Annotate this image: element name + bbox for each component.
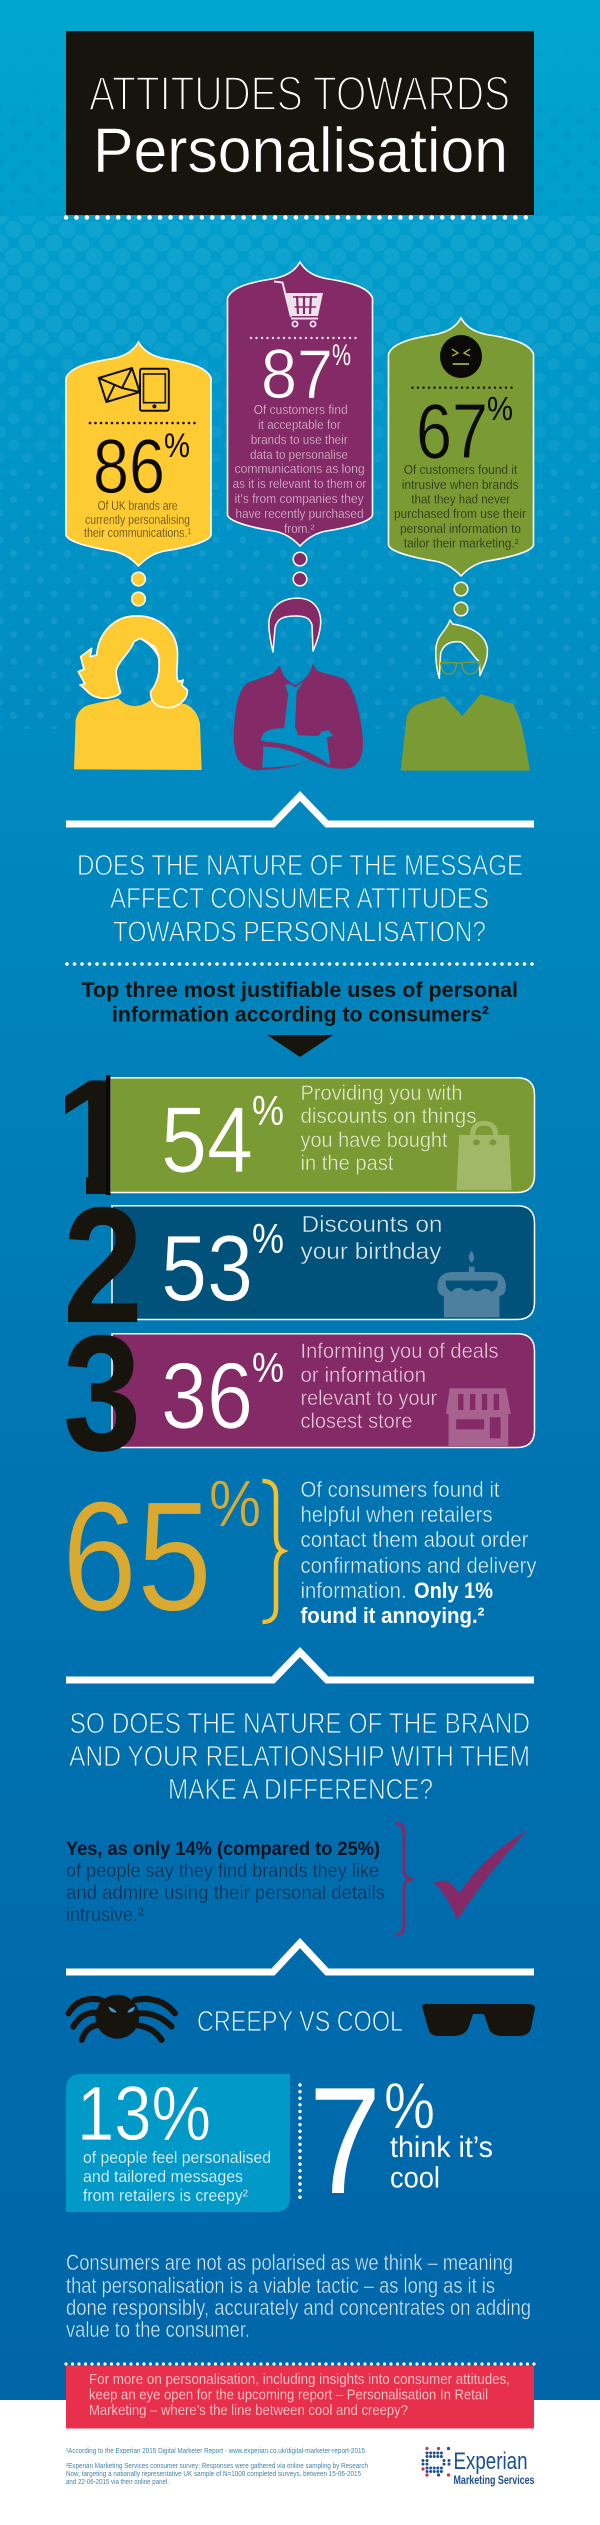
icon: sunglasses [422, 2004, 535, 2036]
text: 65% description: found it annoying.² [300, 1603, 484, 1628]
divider chevron 2 [66, 1652, 534, 1680]
thought dots: green [454, 582, 468, 616]
text: 13% description: of people feel personalised [83, 2149, 271, 2167]
text: footnotes: ¹According to the Experian 2015 Digital Marketer Report - www.experian.co.uk/digital-marketer-report-2015 [66, 2448, 365, 2455]
text: yes as only 14%: Yes, as only 14% (compared to 25%) [66, 1838, 380, 1860]
text: yellow bubble caption [84, 499, 191, 540]
text: green bubble caption: personal information to [400, 521, 521, 536]
text: footnotes: and 22-06-2015 via their online panel. [66, 2479, 169, 2486]
stat: 65%: % [209, 1466, 261, 1540]
text: purple bubble caption [233, 402, 367, 536]
heading: does the nature of the message: AFFECT CONSUMER ATTITUDES [110, 883, 489, 915]
icon: shopping bag [457, 1123, 512, 1190]
text: conclusion paragraph: value to the consumer. [66, 2317, 250, 2342]
text: 13% description: from retailers is creepy² [83, 2187, 248, 2205]
callout: red report banner [66, 2366, 534, 2428]
text: yes as only 14%: and admire using their personal details [66, 1882, 385, 1904]
icon: angry face [440, 335, 482, 378]
text: purple bubble caption: it's from companies they [235, 491, 364, 506]
text: purple bubble caption: communications as long [235, 461, 365, 476]
text: rank 3 description: Informing you of deals [300, 1340, 498, 1363]
figure: man with glasses [401, 620, 530, 771]
callout: red report banner: Marketing – where’s the line between cool and creepy? [89, 2403, 408, 2419]
text: conclusion paragraph: Consumers are not as polarised as we think – meaning [66, 2250, 513, 2275]
stat: 7% cool: % [384, 2069, 435, 2142]
text: green bubble caption: Of customers found it [404, 462, 518, 477]
panel: rank 1 card [65, 1075, 536, 1195]
text: 65% description: confirmations and delivery [300, 1553, 536, 1578]
stat: 87%: % [332, 339, 351, 372]
text: rank 1 description: discounts on things [300, 1105, 476, 1128]
divider chevron 1 [66, 796, 534, 824]
icon: shopping cart [274, 282, 323, 327]
stat: 86%: 86 [93, 424, 165, 510]
text: purple bubble caption: have recently purchased [236, 506, 364, 521]
icon: envelope and phone [99, 368, 169, 411]
text: green bubble caption: intrusive when brands [402, 477, 519, 492]
heading: so does the nature of the brand [69, 1708, 530, 1806]
stat: 53%: 53 [161, 1216, 253, 1320]
text: rank 1 description [300, 1082, 476, 1175]
text: rank 3 description: or information [300, 1364, 426, 1387]
figure: woman with yellow hair [74, 616, 202, 770]
title block [66, 31, 534, 215]
text: conclusion paragraph [66, 2250, 531, 2342]
text: conclusion paragraph: that personalisation is a viable tactic – as long as it is [66, 2273, 495, 2298]
bracket: purple brace [395, 1823, 411, 1935]
subheading: top three uses: information according to consumers² [112, 1002, 489, 1026]
text: rank 1 description: you have bought [300, 1129, 448, 1152]
text: rank 1 description: Providing you with [300, 1082, 462, 1105]
text: footnotes [66, 2448, 368, 2486]
panel: rank 3 card [63, 1301, 534, 1485]
text: rank 3 description [300, 1340, 498, 1433]
text: purple bubble caption: from.² [284, 521, 315, 536]
text: rank 3 description: closest store [300, 1410, 412, 1433]
panel: green thought bubble 67% [388, 318, 534, 576]
text: green bubble caption [394, 462, 527, 551]
text: Marketing Services: Marketing Services [454, 2475, 534, 2487]
stat: 36%: 36 [161, 1343, 253, 1448]
subheading: top three uses [82, 978, 518, 1026]
heading: does the nature of the message [77, 850, 523, 948]
stat: 87%: 87 [261, 335, 333, 413]
heading: so does the nature of the brand: AND YOUR RELATIONSHIP WITH THEM [69, 1741, 530, 1773]
text: yellow bubble caption: Of UK brands are [98, 499, 178, 513]
figure: man with crossed arms [234, 598, 363, 770]
stat: 86%: % [164, 427, 190, 465]
stat: 7% cool: 7 [309, 2056, 381, 2226]
icon: spider [68, 1995, 175, 2040]
text: rank 2 description: Discounts on [302, 1211, 442, 1237]
stat: 67%: 67 [416, 387, 488, 475]
icon: storefront [446, 1388, 511, 1446]
stat: 7% cool [309, 2056, 493, 2226]
text: footnotes: ²Experian Marketing Services consumer survey: Responses were gathered via online sampling by Research [66, 2463, 368, 2470]
number 1: 1 [50, 1045, 141, 1229]
panel: rank 2 card [63, 1173, 534, 1357]
text: purple bubble caption: as it is relevant to them or [233, 476, 367, 491]
text: 65% description [300, 1477, 536, 1628]
text: rank 3 description: relevant to your [300, 1387, 437, 1410]
panel: 13% creepy [66, 2071, 290, 2212]
stat: 54%: 54 [161, 1087, 253, 1192]
text: yes as only 14%: of people say they find brands they like [66, 1860, 379, 1882]
stat: 65%: 65 [62, 1470, 212, 1644]
text: 13% description: and tailored messages [83, 2168, 243, 2186]
text: 65% description: information. [300, 1578, 406, 1603]
text: yellow bubble caption: currently personalising [85, 513, 190, 527]
thought dots: yellow [132, 572, 145, 606]
text: rank 1 description: in the past [300, 1152, 394, 1175]
text: 65% description: contact them about order [300, 1527, 528, 1552]
title line one: ATTITUDES TOWARDS [89, 68, 510, 121]
text: 13% description [83, 2149, 271, 2205]
stat: 54%: % [252, 1087, 284, 1134]
icon: Experian dot mark [421, 2447, 450, 2477]
text: purple bubble caption: it acceptable for [258, 417, 341, 432]
panel: purple thought bubble 87% [228, 262, 372, 546]
text: purple bubble caption: Of customers find [254, 402, 348, 417]
panel: yellow thought bubble 86% [66, 342, 211, 566]
stat: 13%: 13% [77, 2071, 211, 2157]
stat: 67%: % [487, 390, 513, 427]
number 3: 3 [63, 1301, 141, 1485]
text: green bubble caption: purchased from use their [394, 506, 527, 521]
text: green bubble caption: tailor their marketing.² [404, 536, 519, 551]
heading: does the nature of the message: TOWARDS PERSONALISATION? [113, 916, 486, 948]
text: yellow bubble caption: their communications.¹ [84, 526, 191, 540]
stat: 36%: % [252, 1344, 284, 1391]
divider chevron 3 [66, 1943, 534, 1972]
stat: 53%: % [252, 1215, 284, 1262]
text: purple bubble caption: brands to use their [251, 432, 348, 447]
text: think it's cool [390, 2131, 493, 2194]
text: think it's cool: cool [390, 2162, 440, 2194]
text: purple bubble caption: data to personalise [250, 447, 348, 462]
text: rank 2 description [300, 1211, 442, 1264]
text: 65% description: Of consumers found it [300, 1477, 500, 1502]
text: 65% description: Only 1% [414, 1578, 493, 1603]
callout: red report banner: keep an eye open for the upcoming report – Personalisation In Retail [89, 2388, 488, 2404]
subheading: top three uses: Top three most justifiable uses of personal [82, 978, 518, 1002]
text: green bubble caption: that they had never [411, 492, 511, 507]
number 2: 2 [63, 1173, 143, 1357]
callout: red report banner: For more on personalisation, including insights into consumer attitudes, [89, 2372, 510, 2388]
heading: creepy vs cool: CREEPY VS COOL [197, 2006, 403, 2038]
text: yes as only 14% [66, 1838, 385, 1926]
text: Experian wordmark: Experian [454, 2448, 528, 2475]
logo: Experian Marketing Services [421, 2447, 534, 2487]
icon: tick [434, 1830, 528, 1920]
heading: does the nature of the message: DOES THE NATURE OF THE MESSAGE [77, 850, 523, 882]
icon: birthday cake [437, 1251, 506, 1317]
heading: so does the nature of the brand: MAKE A DIFFERENCE? [168, 1774, 433, 1806]
thought dots: purple [293, 552, 307, 586]
arrow: down triangle [267, 1035, 333, 1057]
text: footnotes: Now, targeting a nationally representative UK sample of N=1000 completed surveys, between 15-06-2015 [66, 2471, 361, 2478]
text: yes as only 14%: intrusive.² [66, 1904, 144, 1926]
text: rank 2 description: your birthday [300, 1238, 442, 1264]
bracket: yellow brace [262, 1481, 283, 1622]
text: 65% description: helpful when retailers [300, 1502, 492, 1527]
heading: so does the nature of the brand: SO DOES THE NATURE OF THE BRAND [70, 1708, 530, 1740]
title line two: Personalisation [93, 116, 508, 186]
text: think it's cool: think it’s [390, 2131, 493, 2164]
